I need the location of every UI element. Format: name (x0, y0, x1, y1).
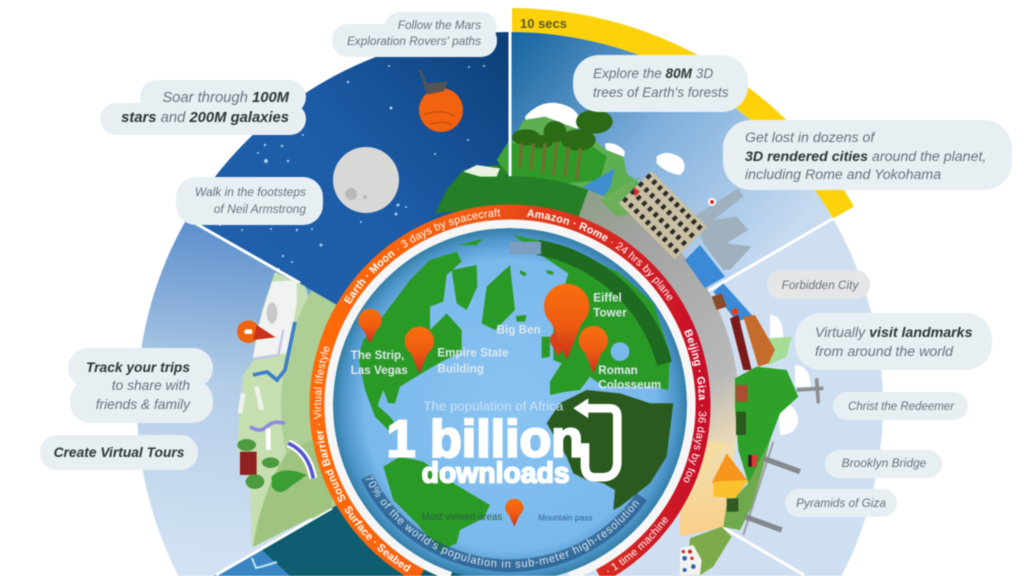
place labels: Big Ben (497, 323, 541, 336)
pin: Big Ben (544, 284, 589, 360)
pin: Las Vegas (358, 309, 382, 343)
place labels: Las Vegas (351, 364, 408, 377)
Iceland (516, 315, 527, 322)
Arctic dark band (538, 247, 665, 364)
land band: virtual tours section (237, 272, 345, 547)
scene: Forbidden City, Christ the Redeemer, bridge and pyramids (680, 283, 823, 575)
bubble: Christ the Redeemer: Christ the Redeemer (848, 401, 955, 413)
bubble: 3D trees: Explore the 80M 3D (593, 66, 713, 81)
place labels (351, 292, 661, 391)
bubble: landmarks: Virtually visit landmarks (815, 325, 973, 341)
progress ring (317, 212, 703, 576)
bubble: track your trips: to share with (112, 378, 190, 393)
bubble: stars and galaxies (100, 80, 306, 135)
ring labels: Amazon · Rome · 24 hrs by plane (526, 208, 673, 302)
Caspian Sea (611, 342, 629, 361)
wedge: virtual tours sky (137, 218, 510, 576)
bubble: Brooklyn Bridge: Brooklyn Bridge (842, 456, 927, 470)
place labels: Colosseum (598, 378, 661, 391)
wedge: ocean (214, 405, 510, 576)
wedge separators (187, 32, 833, 575)
wedge: Earth forests and cities (510, 32, 833, 405)
ring labels: Surface · Seabed (344, 505, 412, 572)
Britain and specks (520, 270, 553, 358)
pin: Colosseum (579, 326, 608, 373)
land band: grey city section (583, 204, 724, 442)
U-turn arrow (585, 408, 617, 477)
moon (333, 147, 399, 213)
ring labels: Sound Barrier · Virtual lifestyle (312, 346, 346, 503)
ocean shallow water (217, 550, 290, 576)
wedge: space (187, 32, 510, 405)
bubble: Mars rovers: Exploration Rovers' paths (347, 34, 481, 48)
bubble: Brooklyn Bridge (825, 450, 942, 478)
bubble: track your trips: friends & family (96, 397, 191, 412)
place labels: Roman (598, 364, 638, 377)
ring labels (312, 208, 708, 573)
pin: most viewed (505, 499, 523, 527)
bubble: stars and galaxies: Soar through 100M (162, 90, 290, 106)
Africa caption: The population of Africa (423, 398, 564, 413)
pin: Empire State Building (405, 327, 434, 373)
wedge: lower right (510, 405, 806, 576)
bubble: landmarks: from around the world (815, 344, 954, 360)
bubble: Mars rovers (332, 12, 497, 57)
place labels: Eiffel (593, 292, 622, 305)
place labels: Building (437, 362, 484, 375)
bubble: Forbidden City (767, 270, 870, 299)
ring labels: · 1 time machine (606, 516, 669, 573)
land band: forest section (466, 191, 583, 204)
place labels: Empire State (437, 347, 509, 360)
most viewed caption: Most viewed areas (422, 512, 502, 523)
Arctic islands and Greenland (452, 238, 515, 330)
headline number: 1 billion (387, 411, 583, 469)
population band text: 70% of the world's population in sub-meter high-resolution (365, 474, 640, 568)
bubble: Neil Armstrong (176, 177, 323, 225)
bubble: track your trips: Track your trips (86, 360, 190, 375)
land band: sand section (692, 442, 721, 518)
headline unit: downloads (422, 458, 570, 490)
Central America (365, 390, 395, 430)
bubble: Christ the Redeemer (833, 392, 968, 420)
bubble: Pyramids of Giza (785, 489, 897, 517)
arrow head (573, 398, 588, 418)
hill above globe, upper left (435, 142, 508, 213)
bubble: Neil Armstrong: Walk in the footsteps (195, 185, 306, 199)
Africa (547, 390, 673, 510)
bubble: create virtual tours (40, 435, 198, 470)
North America (358, 252, 462, 412)
ring labels: Beijing · Giza · 36 days by foot (683, 328, 708, 484)
compass tab (509, 242, 541, 254)
Europe and Asia (513, 235, 670, 395)
bubble: stars and galaxies: stars and 200M galaxies (121, 110, 289, 126)
bubble: 3D cities: 3D rendered cities around the planet, (745, 149, 986, 165)
bubble: Mars rovers: Follow the Mars (398, 18, 481, 32)
place labels: Tower (593, 307, 627, 320)
bubble: 3D cities: Get lost in dozens of (745, 130, 876, 146)
pin: behind Big Ben (549, 332, 563, 357)
scene: forest hill (512, 103, 685, 207)
mountain caption: Mountain pass (538, 513, 592, 523)
population band (367, 477, 642, 566)
bubble: create virtual tours: Create Virtual Tours (54, 445, 185, 460)
globe (332, 227, 688, 576)
timer label: 10 secs (520, 16, 567, 31)
place labels: The Strip, (351, 349, 404, 362)
Mars with rover (419, 70, 463, 132)
yellow 10 secs timer arc (512, 8, 854, 218)
bubble: track your trips (68, 348, 213, 423)
bubble: landmarks (795, 313, 992, 370)
scene: tour map with route and pins (237, 280, 313, 492)
scene: Colosseum, city and river (600, 171, 752, 288)
white globe rim (329, 224, 691, 576)
bubble: 3D trees (573, 55, 748, 112)
bubble: Forbidden City: Forbidden City (782, 278, 859, 292)
South America (383, 457, 490, 552)
bubble: 3D trees: trees of Earth's forests (593, 85, 729, 100)
stars (219, 65, 485, 272)
ocean squiggle (252, 558, 277, 568)
bubble: Neil Armstrong: of Neil Armstrong (214, 202, 306, 216)
bubble: 3D cities (723, 120, 1012, 190)
ring labels: Earth · Moon · 3 days by spacecraft (343, 208, 501, 305)
bubble: 3D cities: including Rome and Yokohama (745, 167, 941, 183)
wedge: landmarks (510, 218, 883, 576)
bubble: Pyramids of Giza: Pyramids of Giza (796, 496, 886, 510)
